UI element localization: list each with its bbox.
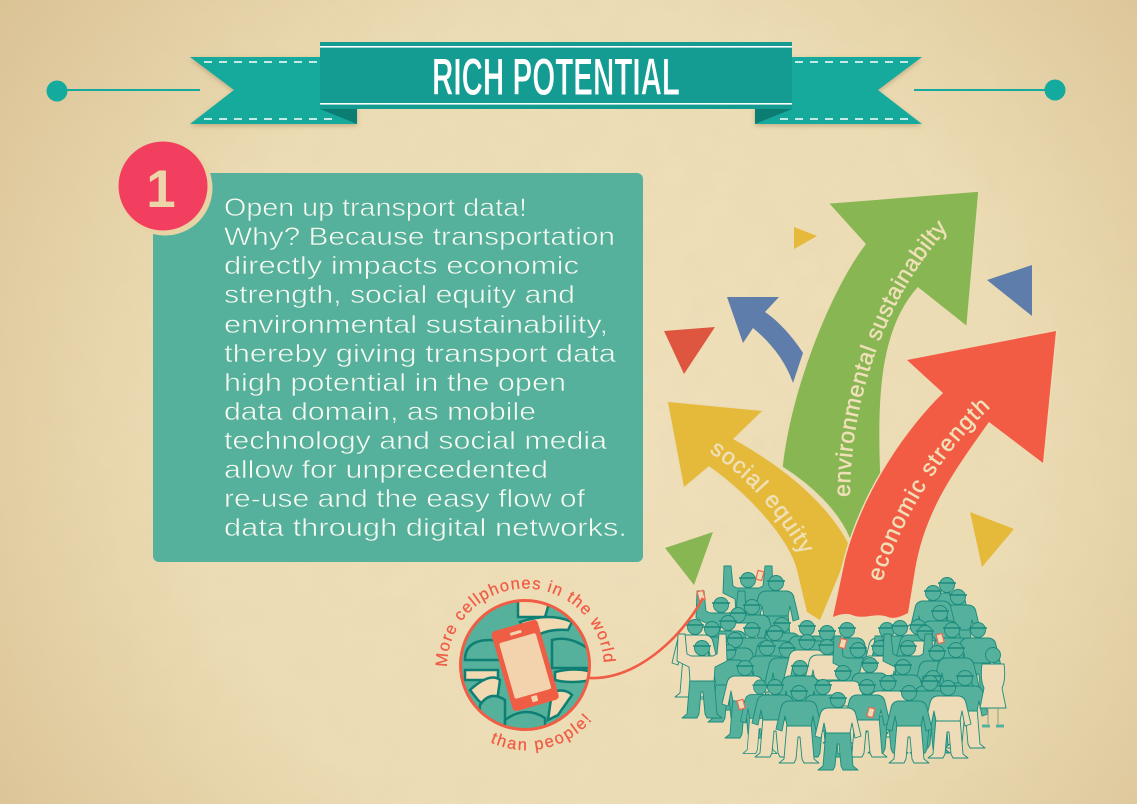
ribbon banner — [190, 42, 922, 124]
crowd of people — [672, 566, 1006, 770]
arrow: economic strength: economic strength — [871, 400, 990, 580]
callout connector line — [589, 598, 703, 678]
panel body text — [224, 194, 627, 542]
text panel — [153, 173, 643, 562]
number badge — [118, 140, 212, 236]
right ribbon tail — [755, 57, 922, 124]
panel body text: thereby giving transport data — [224, 340, 616, 368]
arrow: economic strength — [833, 331, 1056, 618]
held phones — [697, 570, 944, 718]
arrow: blue — [727, 297, 803, 383]
panel body text: allow for unprecedented — [224, 456, 548, 484]
arrow: social equity — [668, 402, 848, 620]
number badge: 1 — [146, 160, 176, 219]
title: RICH POTENTIAL — [432, 48, 680, 107]
panel body text: Open up transport data! — [224, 194, 527, 222]
curved caption bottom: than people! — [492, 713, 592, 754]
magnified crowd — [462, 602, 588, 728]
panel body text: data domain, as mobile — [224, 398, 536, 426]
panel body text: data through digital networks. — [224, 514, 627, 542]
arrow: social equity: social equity — [710, 444, 812, 552]
arrow: environmental sustainability — [782, 192, 978, 538]
panel body text: strength, social equity and — [224, 281, 575, 309]
curved caption top: More cellphones in the world — [435, 580, 616, 666]
panel body text: high potential in the open — [224, 369, 566, 397]
panel body text: Why? Because transportation — [224, 223, 615, 251]
panel body text: re-use and the easy flow of — [224, 485, 585, 513]
panel body text: environmental sustainability, — [224, 311, 608, 339]
ribbon centre panel — [320, 42, 792, 109]
arrow: environmental sustainability: environmental sustainabilty — [835, 220, 947, 496]
woman in dress — [980, 648, 1006, 726]
panel body text: directly impacts economic — [224, 252, 579, 280]
right connector line with dot — [914, 80, 1066, 100]
left connector line with dot — [46, 80, 200, 102]
decorative triangles — [664, 227, 1032, 585]
phone icon — [491, 619, 560, 712]
cellphone callout — [435, 580, 616, 754]
panel body text: technology and social media — [224, 427, 607, 455]
left ribbon tail — [190, 57, 357, 124]
